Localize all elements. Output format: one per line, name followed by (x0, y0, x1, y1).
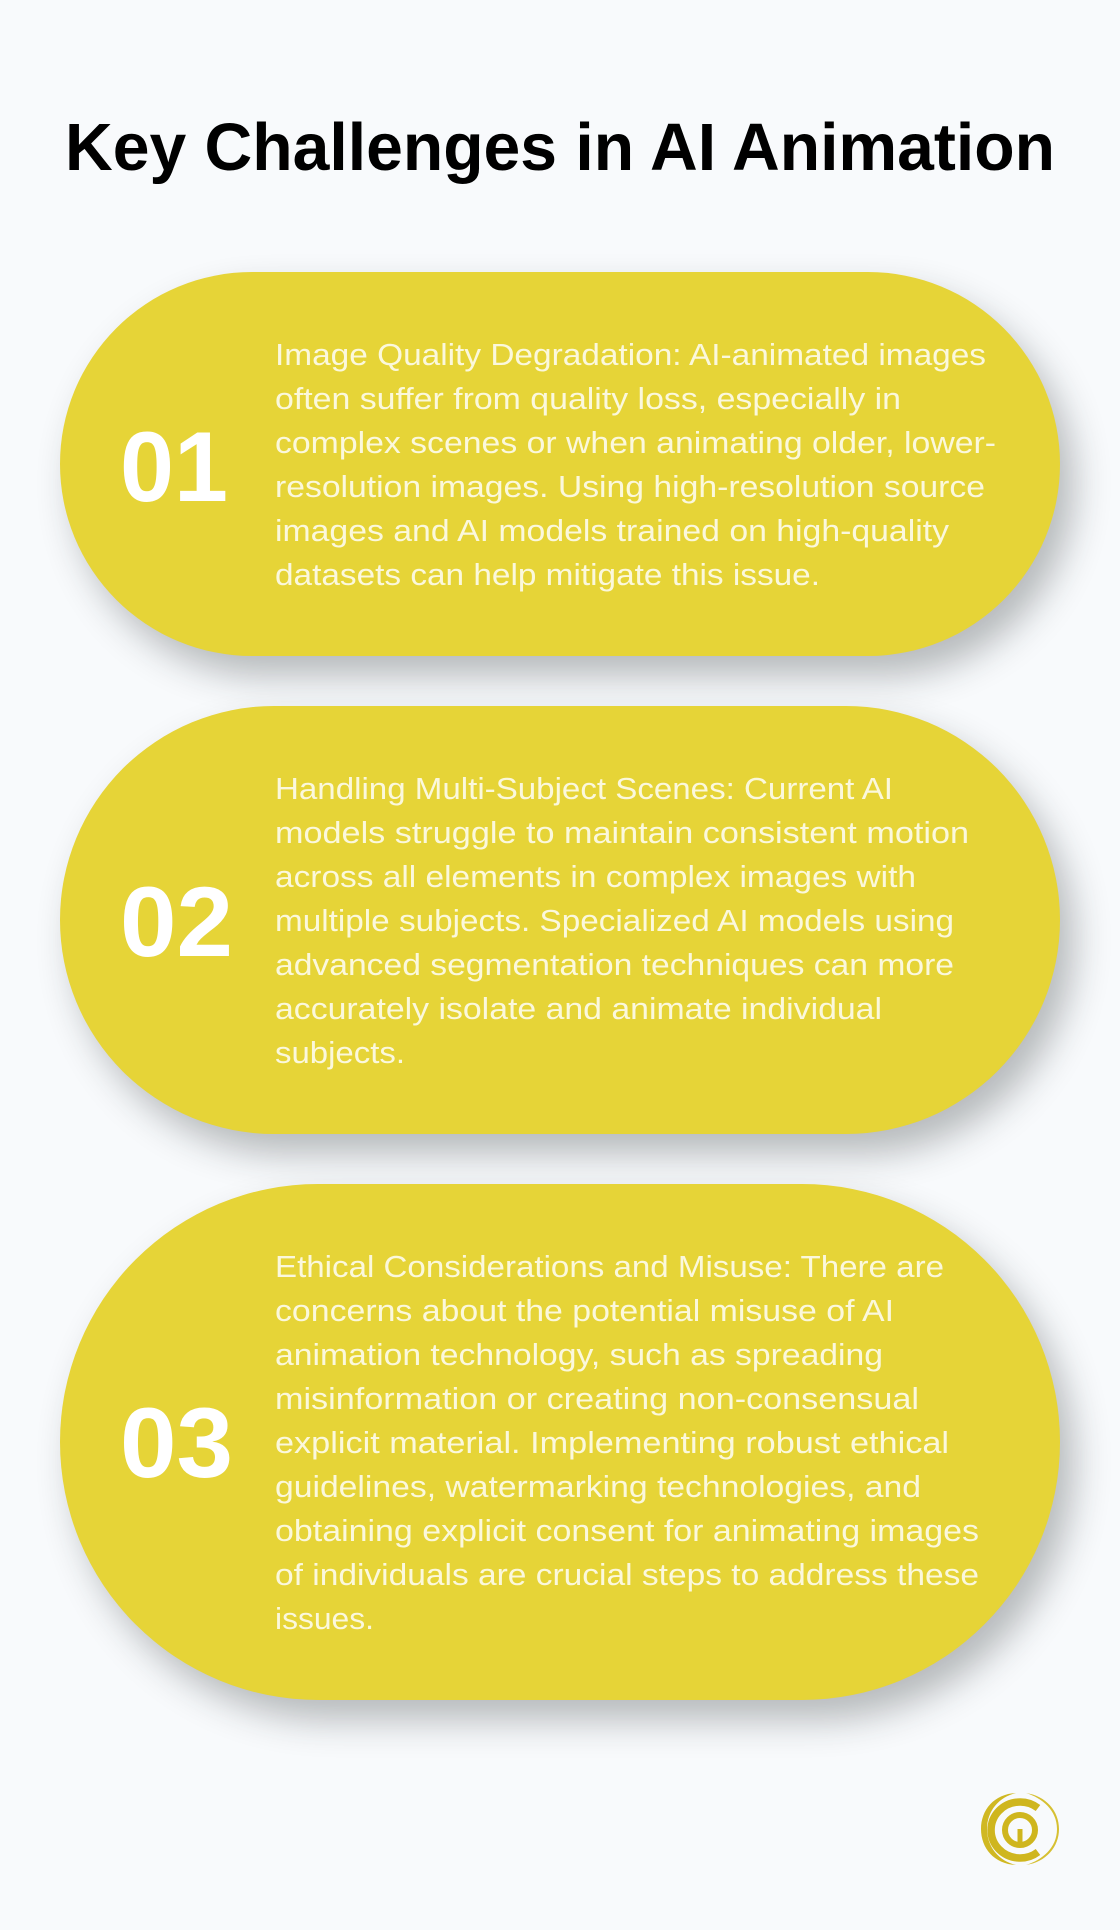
text block: handling multi-subject scenes: accurately isolate and animate individual (275, 992, 882, 1026)
text block: image quality degradation: datasets can help mitigate this issue. (275, 558, 820, 592)
text block: ethical considerations and misuse: issues. (275, 1602, 374, 1636)
icon: gold CQ logo (981, 1793, 1059, 1865)
panel: challenge 03 ethical considerations and misuse (60, 1184, 1060, 1700)
text block: image quality degradation: Image Quality Degradation: AI-animated images (275, 338, 986, 372)
text block: handling multi-subject scenes (275, 772, 969, 1070)
text block: ethical considerations and misuse: explicit material. Implementing robust ethical (275, 1426, 949, 1460)
text block: ethical considerations and misuse: misinformation or creating non-consensual (275, 1382, 919, 1416)
text block: handling multi-subject scenes: Handling Multi-Subject Scenes: Current AI (275, 772, 893, 806)
text block: handling multi-subject scenes: subjects. (275, 1036, 405, 1070)
title: Key Challenges in AI Animation (65, 110, 1055, 185)
text block: ethical considerations and misuse: guidelines, watermarking technologies, and (275, 1470, 921, 1504)
text block: ethical considerations and misuse: animation technology, such as spreading (275, 1338, 883, 1372)
number 01: 01 (120, 411, 228, 522)
text block: ethical considerations and misuse: Ethical Considerations and Misuse: There are (275, 1250, 944, 1284)
text block: ethical considerations and misuse: obtaining explicit consent for animating images (275, 1514, 979, 1548)
text block: image quality degradation: complex scenes or when animating older, lower- (275, 426, 996, 460)
text block: handling multi-subject scenes: across all elements in complex images with (275, 860, 916, 894)
text block: image quality degradation: images and AI models trained on high-quality (275, 514, 950, 548)
text block: image quality degradation: resolution images. Using high-resolution source (275, 470, 985, 504)
text block: handling multi-subject scenes: models struggle to maintain consistent motion (275, 816, 969, 850)
number 02: 02 (120, 866, 233, 977)
text block: ethical considerations and misuse: of individuals are crucial steps to address these (275, 1558, 979, 1592)
text block: ethical considerations and misuse: concerns about the potential misuse of AI (275, 1294, 894, 1328)
text block: ethical considerations and misuse (275, 1250, 979, 1636)
panel: challenge 02 handling multi-subject scenes (60, 706, 1060, 1134)
text block: image quality degradation: often suffer from quality loss, especially in (275, 382, 901, 416)
panel: challenge 01 image quality degradation (60, 272, 1060, 656)
text block: image quality degradation (275, 338, 996, 592)
text block: handling multi-subject scenes: multiple subjects. Specialized AI models using (275, 904, 954, 938)
number 03: 03 (120, 1387, 233, 1498)
text block: handling multi-subject scenes: advanced segmentation techniques can more (275, 948, 954, 982)
